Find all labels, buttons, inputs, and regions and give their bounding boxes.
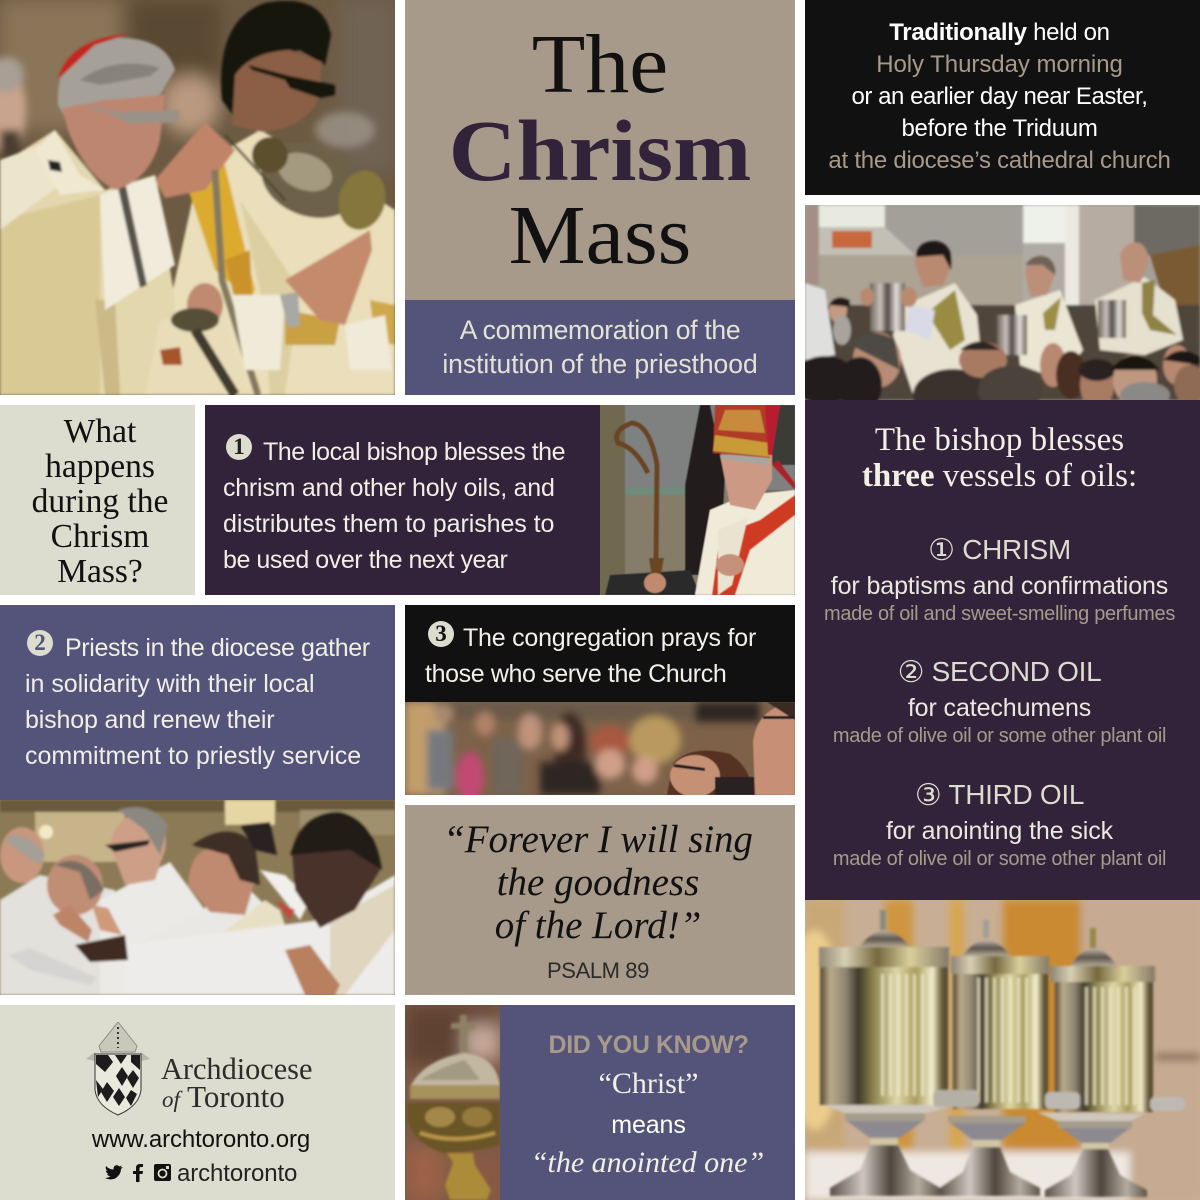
heading: The: The: [532, 18, 668, 111]
logo wordmark: of Toronto: [162, 1079, 285, 1114]
panel: what happens question: during the: [32, 483, 168, 520]
photo: congregation: [405, 702, 795, 795]
oil 3: third oil: ③ THIRD OIL: [915, 778, 1084, 813]
quote: the goodness: [497, 861, 699, 904]
panel: subtitle: institution of the priesthood: [442, 349, 758, 379]
photo: priests praying with raised hands: [0, 800, 395, 995]
vessel 1: [819, 910, 955, 1196]
panel: step 2: [0, 605, 395, 800]
citation: PSALM 89: [547, 958, 649, 983]
oil 1: chrism: [824, 533, 1175, 625]
social handles: [105, 1160, 297, 1187]
oil 2: second oil: ② SECOND OIL: [898, 655, 1101, 690]
right priest hair and face: [221, 1, 331, 125]
panel: when it is held: before the Triduum: [901, 115, 1098, 142]
photo: cardinal swinging censer: [0, 0, 395, 395]
quote: “Forever I will sing: [443, 818, 753, 861]
oil 1: chrism: made of oil and sweet-smelling perfumes: [824, 603, 1175, 625]
panel: step 2: Priests in the diocese gather: [65, 634, 370, 662]
logo wordmark: [161, 1052, 312, 1114]
vessel 1: [870, 283, 905, 331]
photo: bishop with crozier: [600, 405, 795, 595]
heading: three vessels of oils:: [862, 458, 1137, 494]
photo: ornate golden ciborium: [405, 1005, 500, 1200]
number 3: 3: [435, 621, 447, 646]
panel: did you know: [500, 1005, 795, 1200]
vessel 3: [1037, 928, 1185, 1197]
icon: facebook: [133, 1164, 143, 1182]
panel: step 2: bishop and renew their: [25, 706, 274, 734]
panel: when it is held: Holy Thursday morning: [876, 51, 1123, 78]
icon: coat of arms: [86, 1022, 150, 1116]
hands: [155, 122, 235, 198]
panel: three vessels of oils: [805, 400, 1200, 900]
left figure hair and face: [58, 38, 175, 130]
number 1: 1: [233, 434, 245, 459]
left figure body: [0, 130, 175, 395]
oil 2: second oil: [833, 655, 1166, 747]
panel: archdiocese logo and contacts: [0, 1005, 395, 1200]
panel: did you know: means: [611, 1111, 686, 1139]
number 2: [27, 630, 53, 656]
photo: three silver oil vessels: [805, 900, 1200, 1200]
quote: of the Lord!”: [495, 904, 701, 947]
panel: subtitle: [405, 300, 795, 395]
panel: what happens question: happens: [45, 448, 155, 485]
social handles: archtoronto: [177, 1160, 297, 1187]
crozier: [617, 423, 657, 560]
panel: step 2: commitment to priestly service: [25, 742, 361, 770]
server left: [805, 283, 835, 360]
panel: when it is held: Traditionally held on: [889, 19, 1110, 46]
panel: what happens question: What: [64, 413, 136, 450]
panel: title: [405, 0, 795, 300]
bishop: [695, 490, 795, 595]
priest 2: [1015, 290, 1083, 380]
panel: step 1: chrism and other holy oils, and: [223, 474, 555, 502]
heading: Mass: Mass: [509, 189, 691, 282]
heading: [862, 422, 1137, 494]
panel: when it is held: [805, 0, 1200, 195]
panel: step 3: those who serve the Church: [425, 660, 726, 688]
censer: [251, 129, 369, 231]
panel: did you know: “the anointed one”: [531, 1146, 764, 1179]
oil 1: chrism: for baptisms and confirmations: [831, 572, 1168, 600]
oil 2: second oil: made of olive oil or some other plant oil: [833, 725, 1166, 747]
panel: what happens question: [0, 405, 195, 595]
quote: [443, 818, 753, 947]
right priest vestment: [150, 130, 395, 395]
oil 3: third oil: for anointing the sick: [886, 817, 1113, 845]
panel: did you know: DID YOU KNOW?: [549, 1031, 748, 1059]
panel: step 1: distributes them to parishes to: [223, 510, 554, 538]
priest 3: [1095, 277, 1183, 355]
website url: www.archtoronto.org: [92, 1126, 310, 1153]
heading: Chrism: Chrism: [449, 102, 751, 199]
oil 3: third oil: made of olive oil or some other plant oil: [833, 848, 1166, 870]
vessel 2: [940, 920, 1049, 1196]
number 1: [226, 434, 252, 460]
heading: The bishop blesses: [875, 422, 1124, 458]
panel: when it is held: or an earlier day near Easter,: [851, 83, 1148, 110]
priest 1: [893, 283, 980, 400]
icon: instagram: [154, 1164, 171, 1181]
crowd heads: [829, 297, 847, 323]
panel: step 3: The congregation prays for: [463, 624, 756, 652]
panel: step 2: in solidarity with their local: [25, 670, 314, 698]
number 2: 2: [34, 630, 46, 655]
number 3: [428, 621, 454, 647]
oil 1: chrism: ① CHRISM: [928, 533, 1071, 568]
photo: priests carrying oil vessels: [805, 205, 1200, 400]
vessel 2: [997, 315, 1027, 355]
panel: step 1: [205, 405, 600, 595]
oil 2: second oil: for catechumens: [908, 694, 1091, 722]
oil 3: third oil: [833, 778, 1166, 870]
panel: psalm quote: [405, 805, 795, 995]
panel: step 1: The local bishop blesses the: [263, 438, 565, 466]
panel: step 3: [405, 605, 795, 702]
logo wordmark: Archdiocese: [161, 1052, 312, 1086]
panel: what happens question: Chrism: [51, 518, 149, 555]
panel: did you know: “Christ”: [598, 1067, 698, 1100]
panel: what happens question: Mass?: [57, 553, 143, 590]
panel: subtitle: A commemoration of the: [460, 315, 740, 345]
panel: when it is held: at the diocese’s cathedral church: [828, 147, 1171, 174]
panel: step 1: be used over the next year: [223, 546, 507, 574]
icon: twitter: [105, 1165, 123, 1180]
